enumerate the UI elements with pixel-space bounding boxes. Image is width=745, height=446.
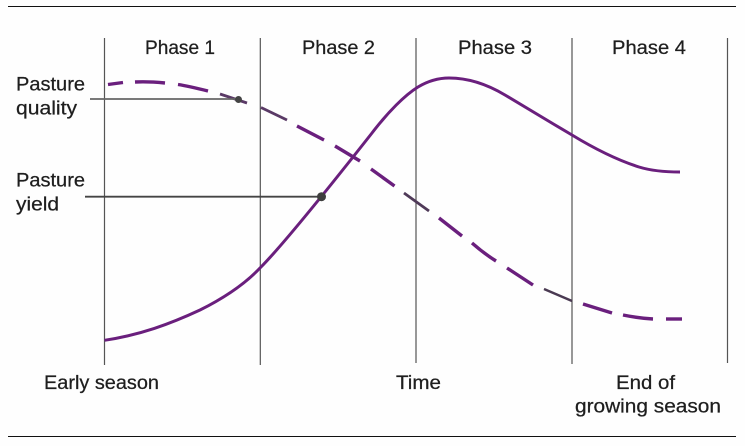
- label: pasture quality: quality: [16, 98, 78, 120]
- arrow: pasture quality pointer: [90, 96, 242, 103]
- label: time: Time: [396, 373, 441, 394]
- label: end of growing season: End of: [616, 373, 676, 394]
- label: end of growing season: [575, 373, 721, 418]
- label: pasture yield: Pasture: [16, 170, 85, 192]
- label: early season: Early season: [44, 373, 159, 394]
- phase headings: [145, 38, 686, 59]
- label: pasture yield: [16, 170, 85, 216]
- curve: pasture yield (solid): [104, 78, 680, 340]
- phase headings: Phase 3: [458, 38, 532, 59]
- phase headings: Phase 4: [612, 38, 686, 59]
- label: pasture quality: Pasture: [16, 74, 85, 96]
- arrow: pasture yield pointer: [85, 192, 326, 201]
- phase headings: Phase 1: [145, 38, 215, 59]
- phase headings: Phase 2: [302, 38, 375, 59]
- curve: pasture quality (dashed): [108, 82, 682, 319]
- label: pasture quality: [16, 74, 85, 120]
- label: end of growing season: growing season: [575, 396, 721, 418]
- label: pasture yield: yield: [16, 194, 59, 216]
